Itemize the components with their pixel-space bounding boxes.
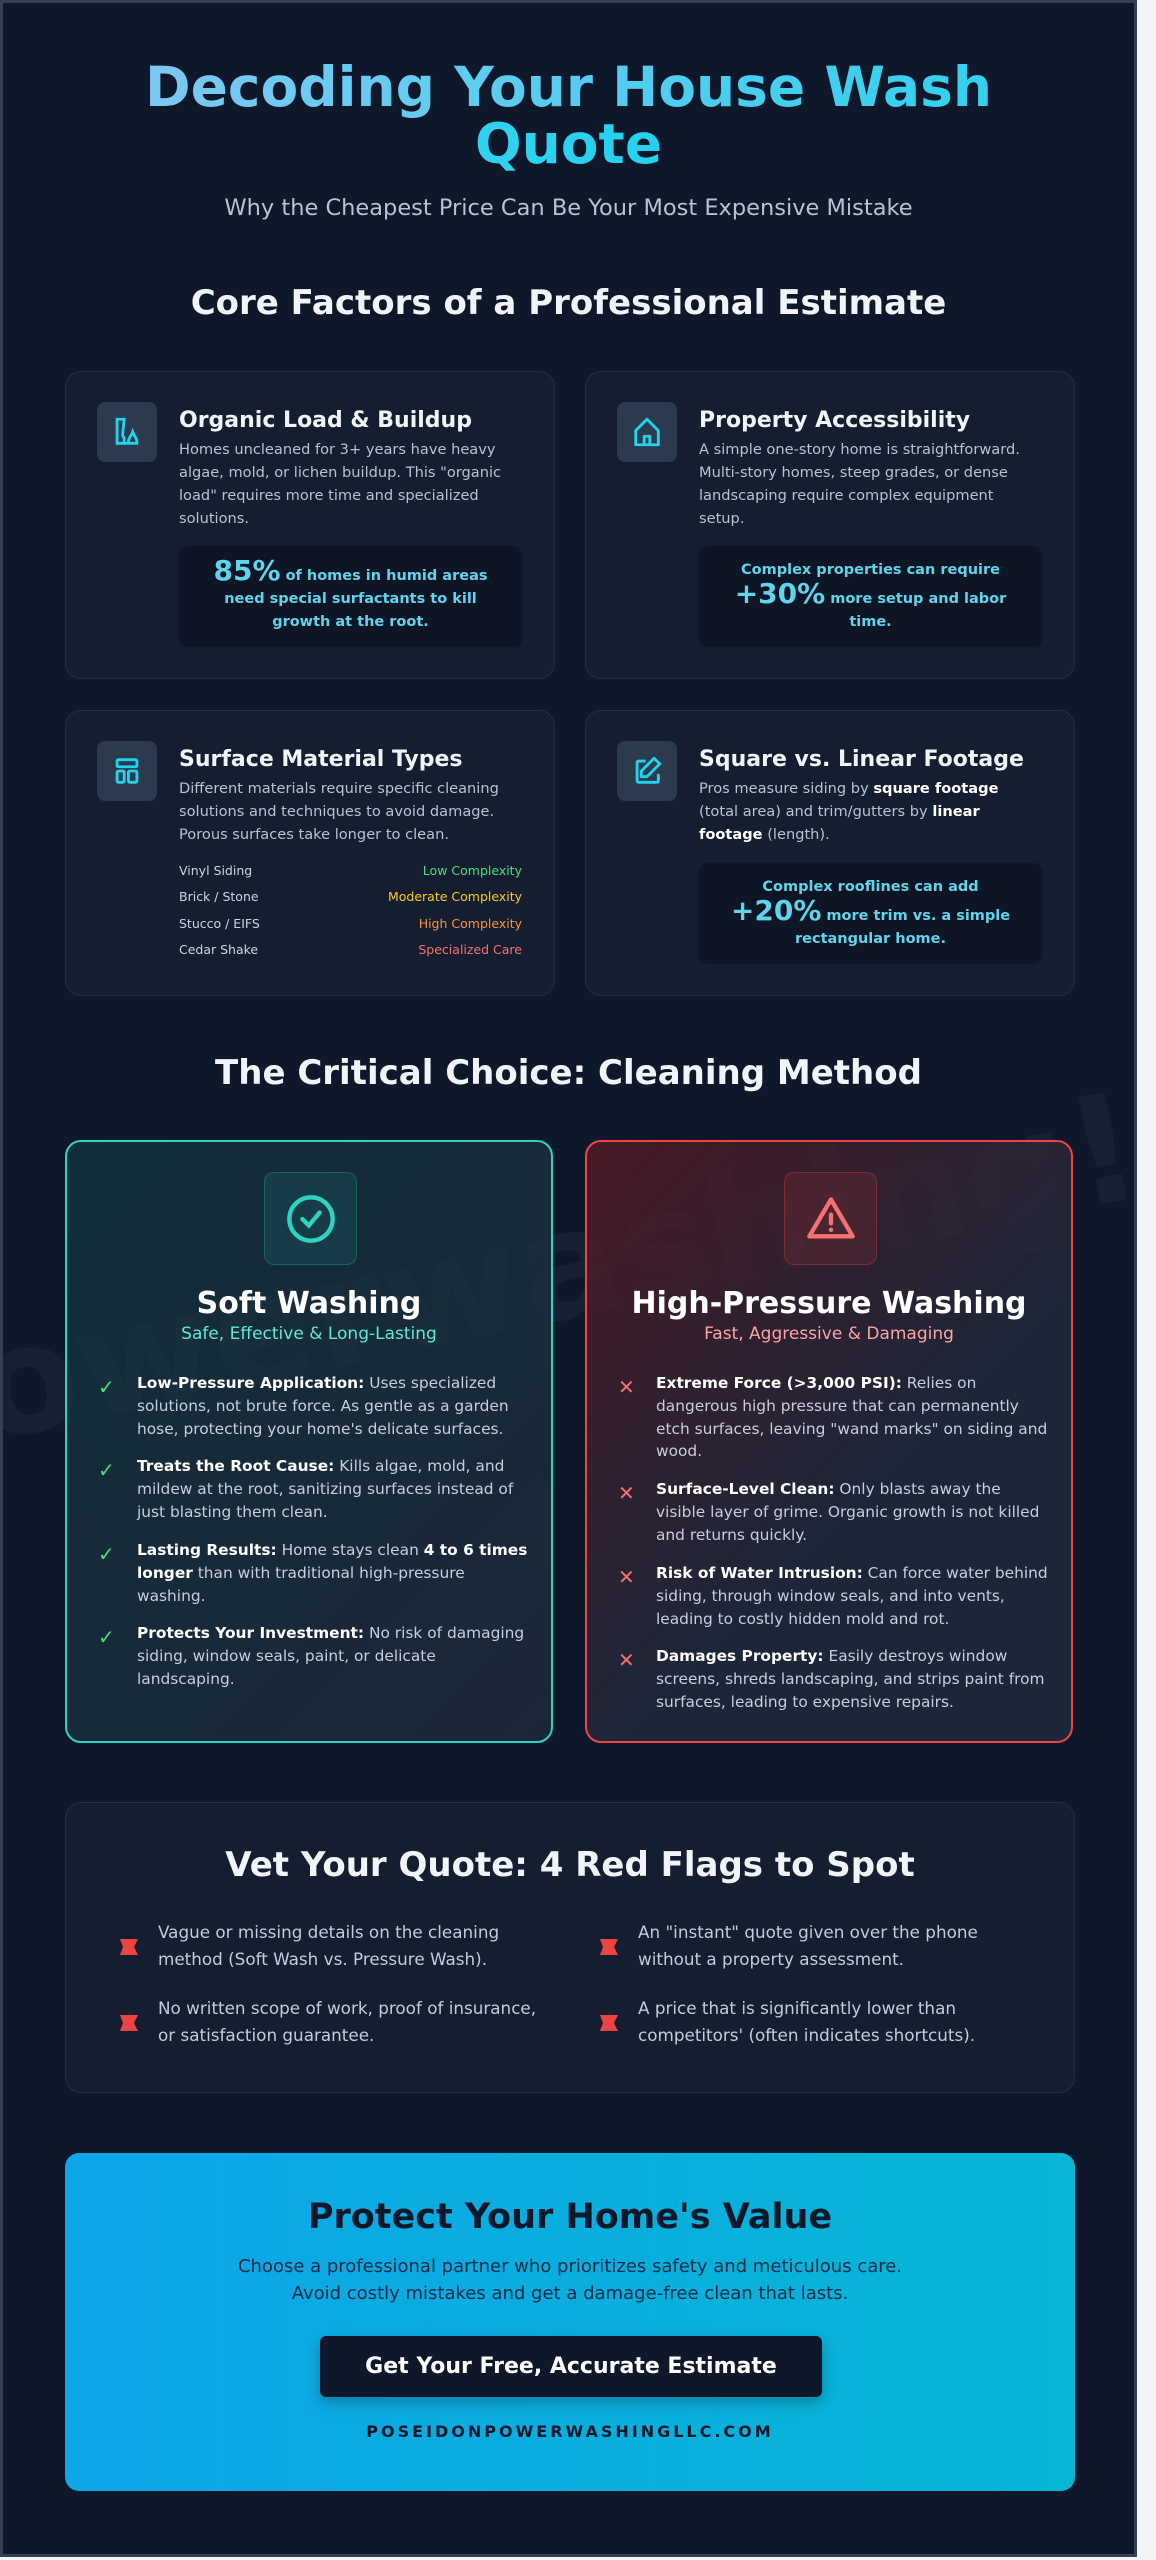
benefits list [98, 1374, 527, 1688]
panel: red flags [65, 1802, 1075, 2093]
flag items [120, 1922, 978, 2044]
stat callout: Complex rooflines can add [762, 879, 979, 895]
icon: edit [617, 741, 677, 801]
subtitle: Safe, Effective & Long-Lasting [181, 1324, 437, 1344]
card title: Property Accessibility [699, 408, 970, 433]
panel: accessibility [585, 371, 1075, 679]
drawbacks list: ✕ [618, 1481, 635, 1505]
title: Soft Washing [197, 1286, 421, 1321]
drawbacks list: ✕ [618, 1565, 635, 1589]
benefits list: Protects Your Investment: No risk of damaging siding, window seals, paint, or delicate landscaping. [137, 1624, 524, 1688]
material list [179, 863, 522, 957]
material list: Cedar Shake [179, 942, 258, 957]
CTA text [238, 2256, 902, 2304]
stat callout: Complex properties can require [741, 562, 1000, 578]
flag items: No written scope of work, proof of insurance, or satisfaction guarantee. [158, 1998, 536, 2044]
panel: soft washing [65, 1140, 553, 1743]
CTA heading: Protect Your Home's Value [308, 2197, 832, 2237]
benefits list: Treats the Root Cause: Kills algae, mold, and mildew at the root, sanitizing surfaces instead of just blasting them clean. [137, 1457, 513, 1521]
drawbacks list: ✕ [618, 1648, 635, 1672]
stat callout [699, 863, 1042, 964]
drawbacks list: Risk of Water Intrusion: Can force water behind siding, through window seals, and into vents, leading to costly hidden mold and rot. [656, 1564, 1048, 1628]
stat callout: 85% of homes in humid areas need special surfactants to kill growth at the root. [214, 554, 487, 630]
heading: core factors: Core Factors of a Professional Estimate [191, 283, 946, 323]
drawbacks list [618, 1374, 1048, 1711]
title [145, 55, 992, 176]
material list: Brick / Stone [179, 889, 259, 904]
subtitle: Why the Cheapest Price Can Be Your Most Expensive Mistake [224, 195, 913, 221]
benefits list: Lasting Results: Home stays clean 4 to 6 times longer than with traditional high-pressure washing. [137, 1541, 527, 1605]
website: POSEIDONPOWERWASHINGLLC.COM [366, 2422, 774, 2441]
subtitle: Fast, Aggressive & Damaging [704, 1324, 954, 1344]
stat callout: +30% more setup and labor time. [735, 577, 1006, 630]
card title: Surface Material Types [179, 747, 463, 772]
card text: Different materials require specific cleaning solutions and techniques to avoid damage. Porous surfaces take longer to clean. [179, 780, 499, 843]
material list: Moderate Complexity [388, 889, 522, 904]
stat callout [179, 546, 522, 647]
panel: high pressure [585, 1140, 1073, 1743]
flag items: Vague or missing details on the cleaning method (Soft Wash vs. Pressure Wash). [158, 1922, 499, 1968]
material list: High Complexity [419, 916, 522, 931]
panel: organic load [65, 371, 555, 679]
icon: buildup [97, 402, 157, 462]
benefits list: ✓ [98, 1542, 115, 1566]
drawbacks list: Surface-Level Clean: Only blasts away the visible layer of grime. Organic growth is not killed and returns quickly. [656, 1480, 1039, 1544]
material list: Low Complexity [423, 863, 522, 878]
material list: Specialized Care [418, 942, 522, 957]
icon: check circle [264, 1172, 357, 1265]
flag items: A price that is significantly lower than competitors' (often indicates shortcuts). [638, 1998, 975, 2044]
icon: warning [784, 1172, 877, 1265]
title: High-Pressure Washing [631, 1286, 1027, 1321]
card text: Homes uncleaned for 3+ years have heavy algae, mold, or lichen buildup. This "organic load" requires more time and specialized solutions. [179, 441, 501, 527]
stat callout: +20% more trim vs. a simple rectangular home. [731, 894, 1010, 947]
drawbacks list: Damages Property: Easily destroys window screens, shreds landscaping, and strips paint from surfaces, leading to expensive repairs. [656, 1647, 1045, 1711]
card title: Organic Load & Buildup [179, 408, 472, 433]
flag items: An "instant" quote given over the phone without a property assessment. [638, 1922, 978, 1968]
title: Decoding Your House Wash [145, 55, 992, 119]
icon: layout [97, 741, 157, 801]
panel: CTA [65, 2153, 1075, 2491]
card text: Pros measure siding by square footage (total area) and trim/gutters by linear footage (length). [699, 780, 998, 843]
button [320, 2336, 822, 2397]
benefits list: ✓ [98, 1625, 115, 1649]
CTA text: Avoid costly mistakes and get a damage-free clean that lasts. [292, 2282, 848, 2304]
benefits list: ✓ [98, 1458, 115, 1482]
panel: footage [585, 710, 1075, 996]
drawbacks list: Extreme Force (>3,000 PSI): Relies on dangerous high pressure that can permanently etch surfaces, leaving "wand marks" on siding and wood. [656, 1374, 1047, 1460]
card title: Square vs. Linear Footage [699, 747, 1024, 772]
panel: surface material [65, 710, 555, 996]
icon: house [617, 402, 677, 462]
material list: Stucco / EIFS [179, 916, 260, 931]
heading: cleaning method: The Critical Choice: Cleaning Method [215, 1053, 922, 1093]
card text: A simple one-story home is straightforward. Multi-story homes, steep grades, or dense landscaping require complex equipment setup. [699, 441, 1020, 527]
CTA text: Choose a professional partner who prioritizes safety and meticulous care. [238, 2256, 902, 2277]
drawbacks list: ✕ [618, 1375, 635, 1399]
title: Quote [475, 112, 662, 176]
benefits list: ✓ [98, 1375, 115, 1399]
button: Get Your Free, Accurate Estimate [365, 2354, 777, 2379]
material list: Vinyl Siding [179, 863, 252, 878]
heading: Vet Your Quote: 4 Red Flags to Spot [225, 1845, 915, 1885]
stat callout [699, 546, 1042, 647]
benefits list: Low-Pressure Application: Uses specialized solutions, not brute force. As gentle as a garden hose, protecting your home's delicate surfaces. [137, 1374, 509, 1438]
